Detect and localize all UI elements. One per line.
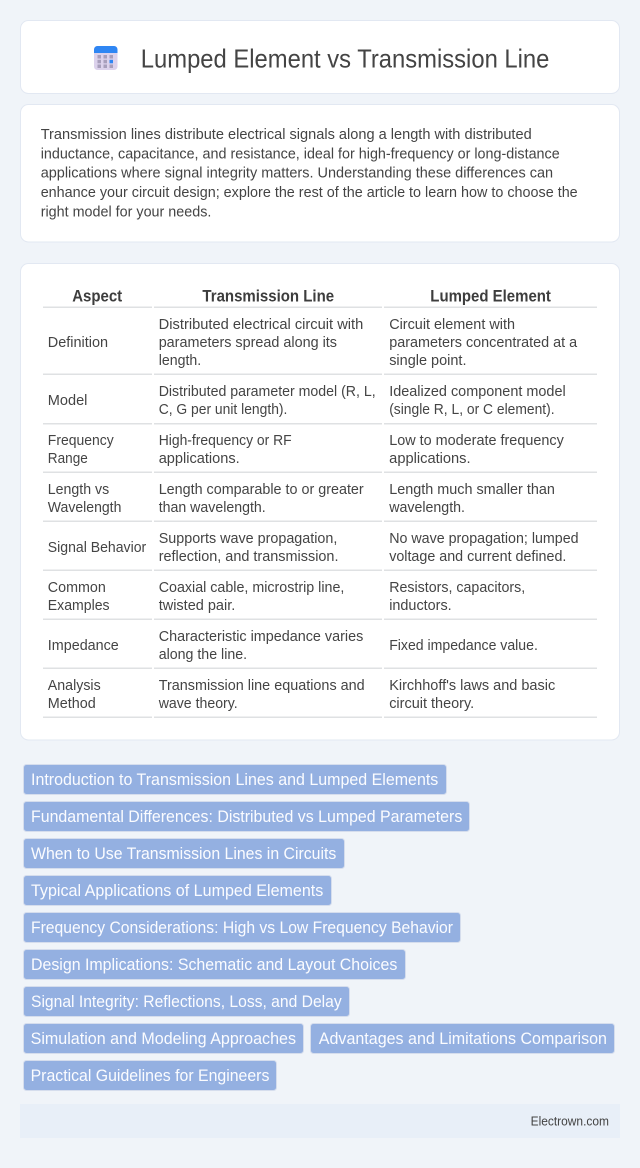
row: Analysis Method: Analysis <box>48 678 101 694</box>
tag: advantages: Advantages and Limitations Comparison <box>319 1029 607 1048</box>
topic tags <box>24 764 614 1090</box>
row: Signal Behavior: Supports wave propagation, <box>159 531 337 547</box>
row: Impedance: along the line. <box>159 647 247 663</box>
row: Definition: parameters concentrated at a <box>389 335 578 351</box>
row: Frequency Range: Range <box>48 451 88 467</box>
row: Signal Behavior: No wave propagation; lumped <box>389 531 579 547</box>
tag: typical applications <box>24 876 332 906</box>
row: Length vs Wavelength: Length comparable to or greater <box>159 482 364 498</box>
row: Common Examples: Coaxial cable, microstrip line, <box>159 580 344 596</box>
row: Analysis Method: Method <box>48 696 96 712</box>
row: Length vs Wavelength: Length much smaller than <box>389 482 555 498</box>
tag: when to use: When to Use Transmission Lines in Circuits <box>31 844 336 863</box>
row: Length vs Wavelength: than wavelength. <box>159 500 266 516</box>
tag: introduction <box>24 764 446 794</box>
intro paragraph: right model for your needs. <box>41 204 211 220</box>
tag: signal integrity <box>24 986 350 1016</box>
row: Model: Idealized component model <box>389 384 566 400</box>
tag: introduction: Introduction to Transmission Lines and Lumped Elements <box>31 770 438 789</box>
tag: practical guidelines: Practical Guidelines for Engineers <box>31 1066 269 1085</box>
row: Analysis Method: wave theory. <box>158 696 238 712</box>
intro paragraph: Transmission lines distribute electrical signals along a length with distributed <box>41 127 532 143</box>
row: Analysis Method: Kirchhoff's laws and basic <box>389 678 555 694</box>
row: Definition <box>48 317 578 369</box>
row: Frequency Range: applications. <box>389 451 471 467</box>
row: Common Examples: Common <box>48 580 106 596</box>
row: Analysis Method: circuit theory. <box>389 696 474 712</box>
row: Impedance: Characteristic impedance varies <box>159 629 363 645</box>
table header row: Aspect <box>72 288 123 306</box>
row: Common Examples: Examples <box>48 598 110 614</box>
row: Length vs Wavelength: Length vs <box>48 482 109 498</box>
row: Common Examples: Resistors, capacitors, <box>389 580 525 596</box>
tag: design implications: Design Implications: Schematic and Layout Choices <box>31 955 397 974</box>
tag: when to use <box>24 838 344 868</box>
row: Frequency Range <box>48 433 564 467</box>
tag: simulation: Simulation and Modeling Approaches <box>31 1029 296 1048</box>
row: Length vs Wavelength <box>48 482 555 516</box>
row: Signal Behavior: voltage and current defined. <box>389 549 566 565</box>
row: Common Examples: inductors. <box>389 598 452 614</box>
panel: title header <box>20 20 620 94</box>
tag: fundamental differences <box>24 802 470 832</box>
tag: signal integrity: Signal Integrity: Reflections, Loss, and Delay <box>31 992 342 1011</box>
row: Model: Model <box>48 393 87 409</box>
tag: frequency considerations: Frequency Considerations: High vs Low Frequency Behavior <box>31 918 453 937</box>
row: Length vs Wavelength: Wavelength <box>48 500 121 516</box>
row: Model: Distributed parameter model (R, L, <box>159 384 376 400</box>
row: Definition: single point. <box>389 353 466 369</box>
row: Model: (single R, L, or C element). <box>389 402 555 418</box>
intro paragraph: applications where signal integrity matters. Understanding these differences can <box>41 166 553 182</box>
row: Signal Behavior: Signal Behavior <box>48 540 146 556</box>
row: Signal Behavior: reflection, and transmission. <box>159 549 338 565</box>
row: Frequency Range: Frequency <box>48 433 114 449</box>
row: Impedance <box>48 629 538 663</box>
tag: practical guidelines <box>24 1060 276 1090</box>
intro paragraph <box>41 127 578 220</box>
row: Definition: Distributed electrical circuit with <box>159 317 363 333</box>
row: Signal Behavior <box>48 531 579 565</box>
title: Lumped Element vs Transmission Line <box>141 43 549 73</box>
row: Frequency Range: High-frequency or RF <box>159 433 292 449</box>
table header row <box>72 288 551 306</box>
row: Definition: length. <box>159 353 201 369</box>
row: Analysis Method: Transmission line equations and <box>159 678 365 694</box>
row: Common Examples: twisted pair. <box>159 598 235 614</box>
row: Analysis Method <box>48 678 555 712</box>
row: Frequency Range: applications. <box>159 451 240 467</box>
row: Definition: Circuit element with <box>389 317 515 333</box>
tag: design implications <box>24 950 406 980</box>
footer credit: Electrown.com <box>531 1114 609 1128</box>
row: Impedance: Fixed impedance value. <box>389 638 538 654</box>
intro paragraph: enhance your circuit design; explore the rest of the article to learn how to choose the <box>41 185 578 201</box>
row: Common Examples <box>48 580 525 614</box>
icon: calendar <box>94 46 118 70</box>
footer <box>20 1104 620 1138</box>
row: Model: C, G per unit length). <box>159 402 287 418</box>
row: Impedance: Impedance <box>48 638 119 654</box>
tag: frequency considerations <box>24 912 460 942</box>
tag: typical applications: Typical Applications of Lumped Elements <box>31 881 323 900</box>
tag: simulation <box>24 1024 304 1054</box>
table header row: Transmission Line <box>202 288 334 306</box>
tag: advantages <box>310 1024 614 1054</box>
row: Model <box>48 384 566 418</box>
tag: fundamental differences: Fundamental Differences: Distributed vs Lumped Parameters <box>31 807 462 826</box>
panel: introduction <box>20 104 620 242</box>
table header row: Lumped Element <box>430 288 551 306</box>
row: Frequency Range: Low to moderate frequency <box>389 433 564 449</box>
panel: comparison table <box>20 264 620 740</box>
intro paragraph: inductance, capacitance, and resistance, ideal for high-frequency or long-distance <box>41 146 560 162</box>
row: Definition: Definition <box>48 335 108 351</box>
row: Length vs Wavelength: wavelength. <box>388 500 465 516</box>
row: Definition: parameters spread along its <box>159 335 337 351</box>
